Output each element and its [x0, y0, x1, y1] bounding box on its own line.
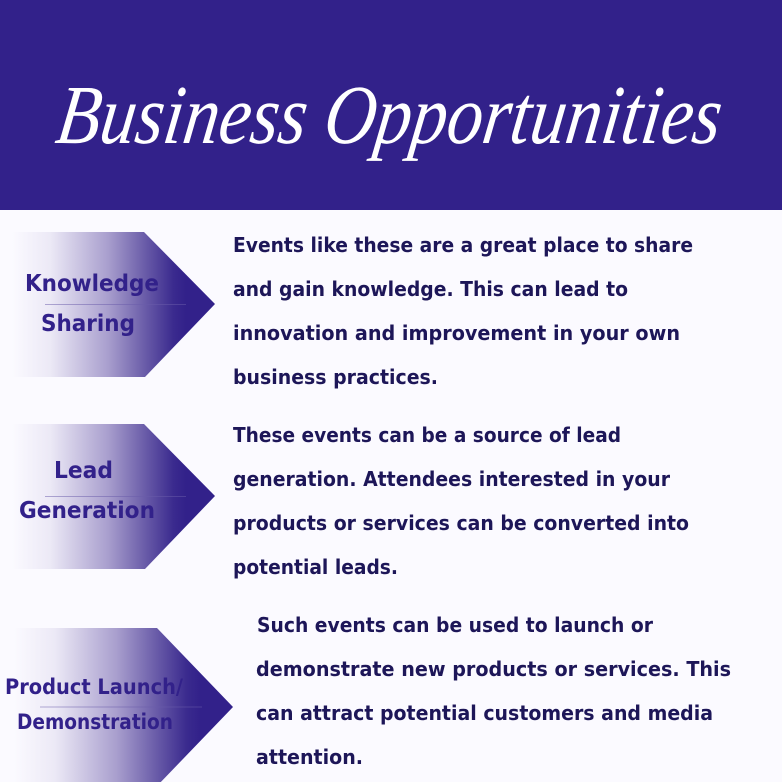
- description: product launch: attention.: [256, 745, 363, 769]
- description: product launch: can attract potential customers and media: [256, 701, 713, 725]
- label: lead generation: Generation: [19, 498, 155, 524]
- description: knowledge sharing: and gain knowledge. This can lead to: [233, 277, 628, 301]
- description: lead generation: products or services can be converted into: [233, 511, 689, 535]
- label: knowledge sharing: Knowledge: [25, 271, 159, 297]
- label: lead generation: Lead: [54, 458, 113, 484]
- description: knowledge sharing: innovation and improvement in your own: [233, 321, 680, 345]
- description: lead generation: potential leads.: [233, 555, 398, 579]
- description: knowledge sharing: Events like these are a great place to share: [233, 233, 693, 257]
- arrow: knowledge sharing: [12, 232, 215, 377]
- description: knowledge sharing: business practices.: [233, 365, 438, 389]
- label: product launch: Demonstration: [17, 710, 173, 734]
- arrow: lead generation: [12, 424, 215, 569]
- header banner: [0, 0, 782, 210]
- panel: knowledge sharing: [12, 232, 693, 389]
- description: lead generation: These events can be a source of lead: [233, 423, 621, 447]
- label: product launch: Product Launch/: [5, 675, 183, 699]
- panel: lead generation: [12, 423, 689, 579]
- arrow: product launch: [14, 628, 233, 782]
- description: product launch: demonstrate new products or services. This: [256, 657, 731, 681]
- description: lead generation: generation. Attendees interested in your: [233, 467, 670, 491]
- label: knowledge sharing: Sharing: [41, 311, 135, 337]
- description: product launch: Such events can be used to launch or: [257, 613, 653, 637]
- panel: product launch: [5, 613, 731, 782]
